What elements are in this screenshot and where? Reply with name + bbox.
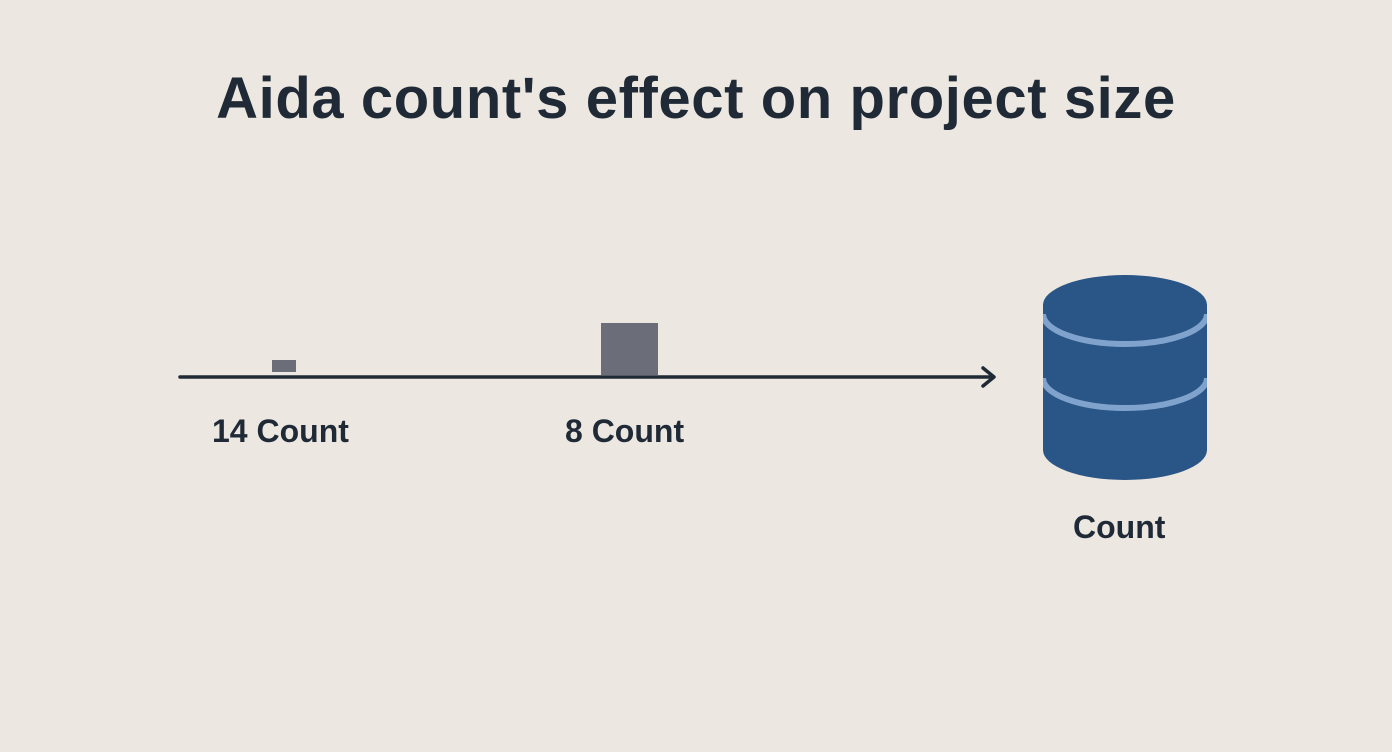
icon: database cylinder <box>1043 275 1207 480</box>
chart: axis with bars <box>178 275 1207 480</box>
label: Count: Count <box>1073 509 1165 545</box>
bar: 14 count <box>272 360 296 372</box>
bar: 8 count <box>601 323 658 375</box>
axis arrow <box>180 368 994 386</box>
label: 8 Count: 8 Count <box>565 413 684 449</box>
title: Aida count's effect on project size <box>216 66 1176 131</box>
label: 14 Count: 14 Count <box>212 413 349 449</box>
